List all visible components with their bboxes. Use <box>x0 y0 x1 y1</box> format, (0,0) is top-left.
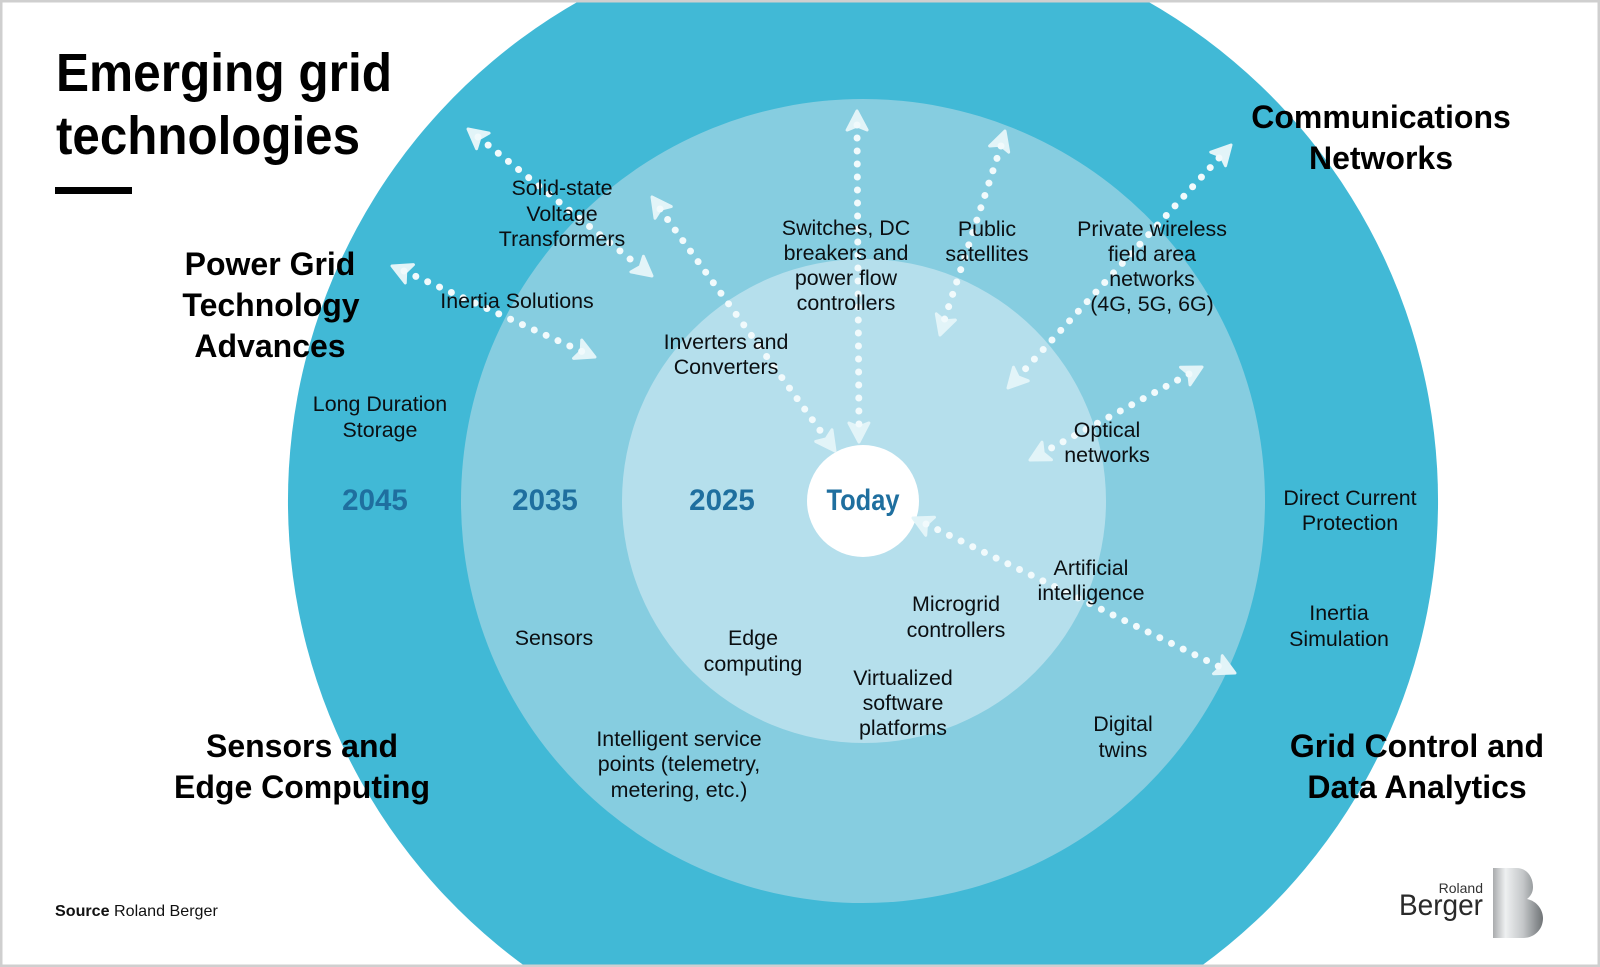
heading: power grid technology advances: Technology <box>182 287 360 323</box>
label: intelligent service points: points (telemetry, <box>598 752 760 776</box>
label: inertia simulation: Simulation <box>1289 627 1389 651</box>
label: optical networks: Optical <box>1074 418 1140 442</box>
title: technologies <box>56 106 360 166</box>
label: edge computing: computing <box>704 652 802 676</box>
title: Emerging grid <box>56 43 392 103</box>
label: inverters and converters: Inverters and <box>664 330 788 354</box>
label: private wireless field area networks: networks <box>1109 267 1195 291</box>
year: 2025: 2025 <box>689 484 755 517</box>
label: long duration storage: Long Duration <box>313 392 447 416</box>
label: direct current protection: Protection <box>1302 511 1398 535</box>
label: microgrid controllers: Microgrid <box>912 592 1000 616</box>
label: sensors: Sensors <box>515 626 593 650</box>
title underline bar <box>55 187 132 194</box>
logo: Roland Berger <box>1399 868 1543 938</box>
arrow: inverters and converters <box>644 191 843 457</box>
year: today: Today <box>826 484 900 517</box>
label: digital twins: twins <box>1099 738 1147 762</box>
label: inertia simulation: Inertia <box>1309 601 1369 625</box>
label: solid-state voltage transformers: Solid-state <box>511 176 613 200</box>
label: digital twins: Digital <box>1093 712 1153 736</box>
label: virtualized software platforms: platforms <box>859 716 947 740</box>
label: edge computing: Edge <box>728 626 778 650</box>
arrow: public satellites <box>930 128 1015 338</box>
label: inertia solutions: Inertia Solutions <box>440 289 594 313</box>
logo: Roland Berger: Roland <box>1439 880 1483 896</box>
label: optical networks: networks <box>1064 443 1150 467</box>
logo: Roland Berger: Berger <box>1399 889 1483 922</box>
label: private wireless field area networks: Private wireless <box>1077 217 1227 241</box>
label: direct current protection: Direct Current <box>1283 486 1417 510</box>
heading: grid control and data analytics: Data Analytics <box>1307 769 1527 805</box>
label: virtualized software platforms: software <box>863 691 943 715</box>
label: microgrid controllers: controllers <box>907 618 1005 642</box>
arrow: switches, DC breakers and power flow controllers <box>847 111 869 442</box>
label: switches, DC breakers and power flow controllers: breakers and <box>784 241 908 265</box>
year: 2035: 2035 <box>512 484 578 517</box>
heading: sensors and edge computing: Sensors and <box>206 728 398 764</box>
label: solid-state voltage transformers: Transformers <box>499 227 625 251</box>
label: solid-state voltage transformers: Voltage <box>526 202 598 226</box>
heading: sensors and edge computing: Edge Computing <box>174 769 430 805</box>
heading: power grid technology advances: Advances <box>194 328 346 364</box>
label: switches, DC breakers and power flow controllers: Switches, DC <box>782 216 910 240</box>
label: virtualized software platforms: Virtualized <box>853 666 953 690</box>
heading: power grid technology advances: Power Grid <box>185 246 355 282</box>
arrow: private wireless field area networks <box>1001 138 1238 395</box>
centre circle: today <box>807 445 919 557</box>
label: artificial intelligence: intelligence <box>1037 581 1145 605</box>
heading: communications networks: Communications <box>1251 99 1511 135</box>
arrow: inertia solutions <box>388 257 599 366</box>
label: private wireless field area networks: (4G, 5G, 6G) <box>1090 292 1214 316</box>
label: switches, DC breakers and power flow controllers: power flow <box>795 266 898 290</box>
ring: 2045 horizon <box>288 0 1438 967</box>
label: private wireless field area networks: field area <box>1108 242 1196 266</box>
title <box>56 43 392 166</box>
year: 2045: 2045 <box>342 484 408 517</box>
heading: grid control and data analytics: Grid Control and <box>1290 728 1544 764</box>
label: inverters and converters: Converters <box>674 355 778 379</box>
ring: 2035 horizon <box>461 99 1265 903</box>
label: intelligent service points: metering, etc.) <box>611 778 747 802</box>
arrow: artificial intelligence <box>909 509 1239 682</box>
label: switches, DC breakers and power flow controllers: controllers <box>797 291 895 315</box>
label: public satellites: satellites <box>945 242 1029 266</box>
label: artificial intelligence: Artificial <box>1054 556 1128 580</box>
label: intelligent service points: Intelligent service <box>596 727 762 751</box>
heading: communications networks: Networks <box>1309 140 1453 176</box>
label: long duration storage: Storage <box>343 418 417 442</box>
arrow: solid-state voltage transformers <box>462 121 658 284</box>
source note: Source Roland Berger <box>55 902 218 920</box>
ring: 2025 horizon <box>622 259 1106 743</box>
arrow: optical networks <box>1025 358 1207 469</box>
label: public satellites: Public <box>958 217 1016 241</box>
